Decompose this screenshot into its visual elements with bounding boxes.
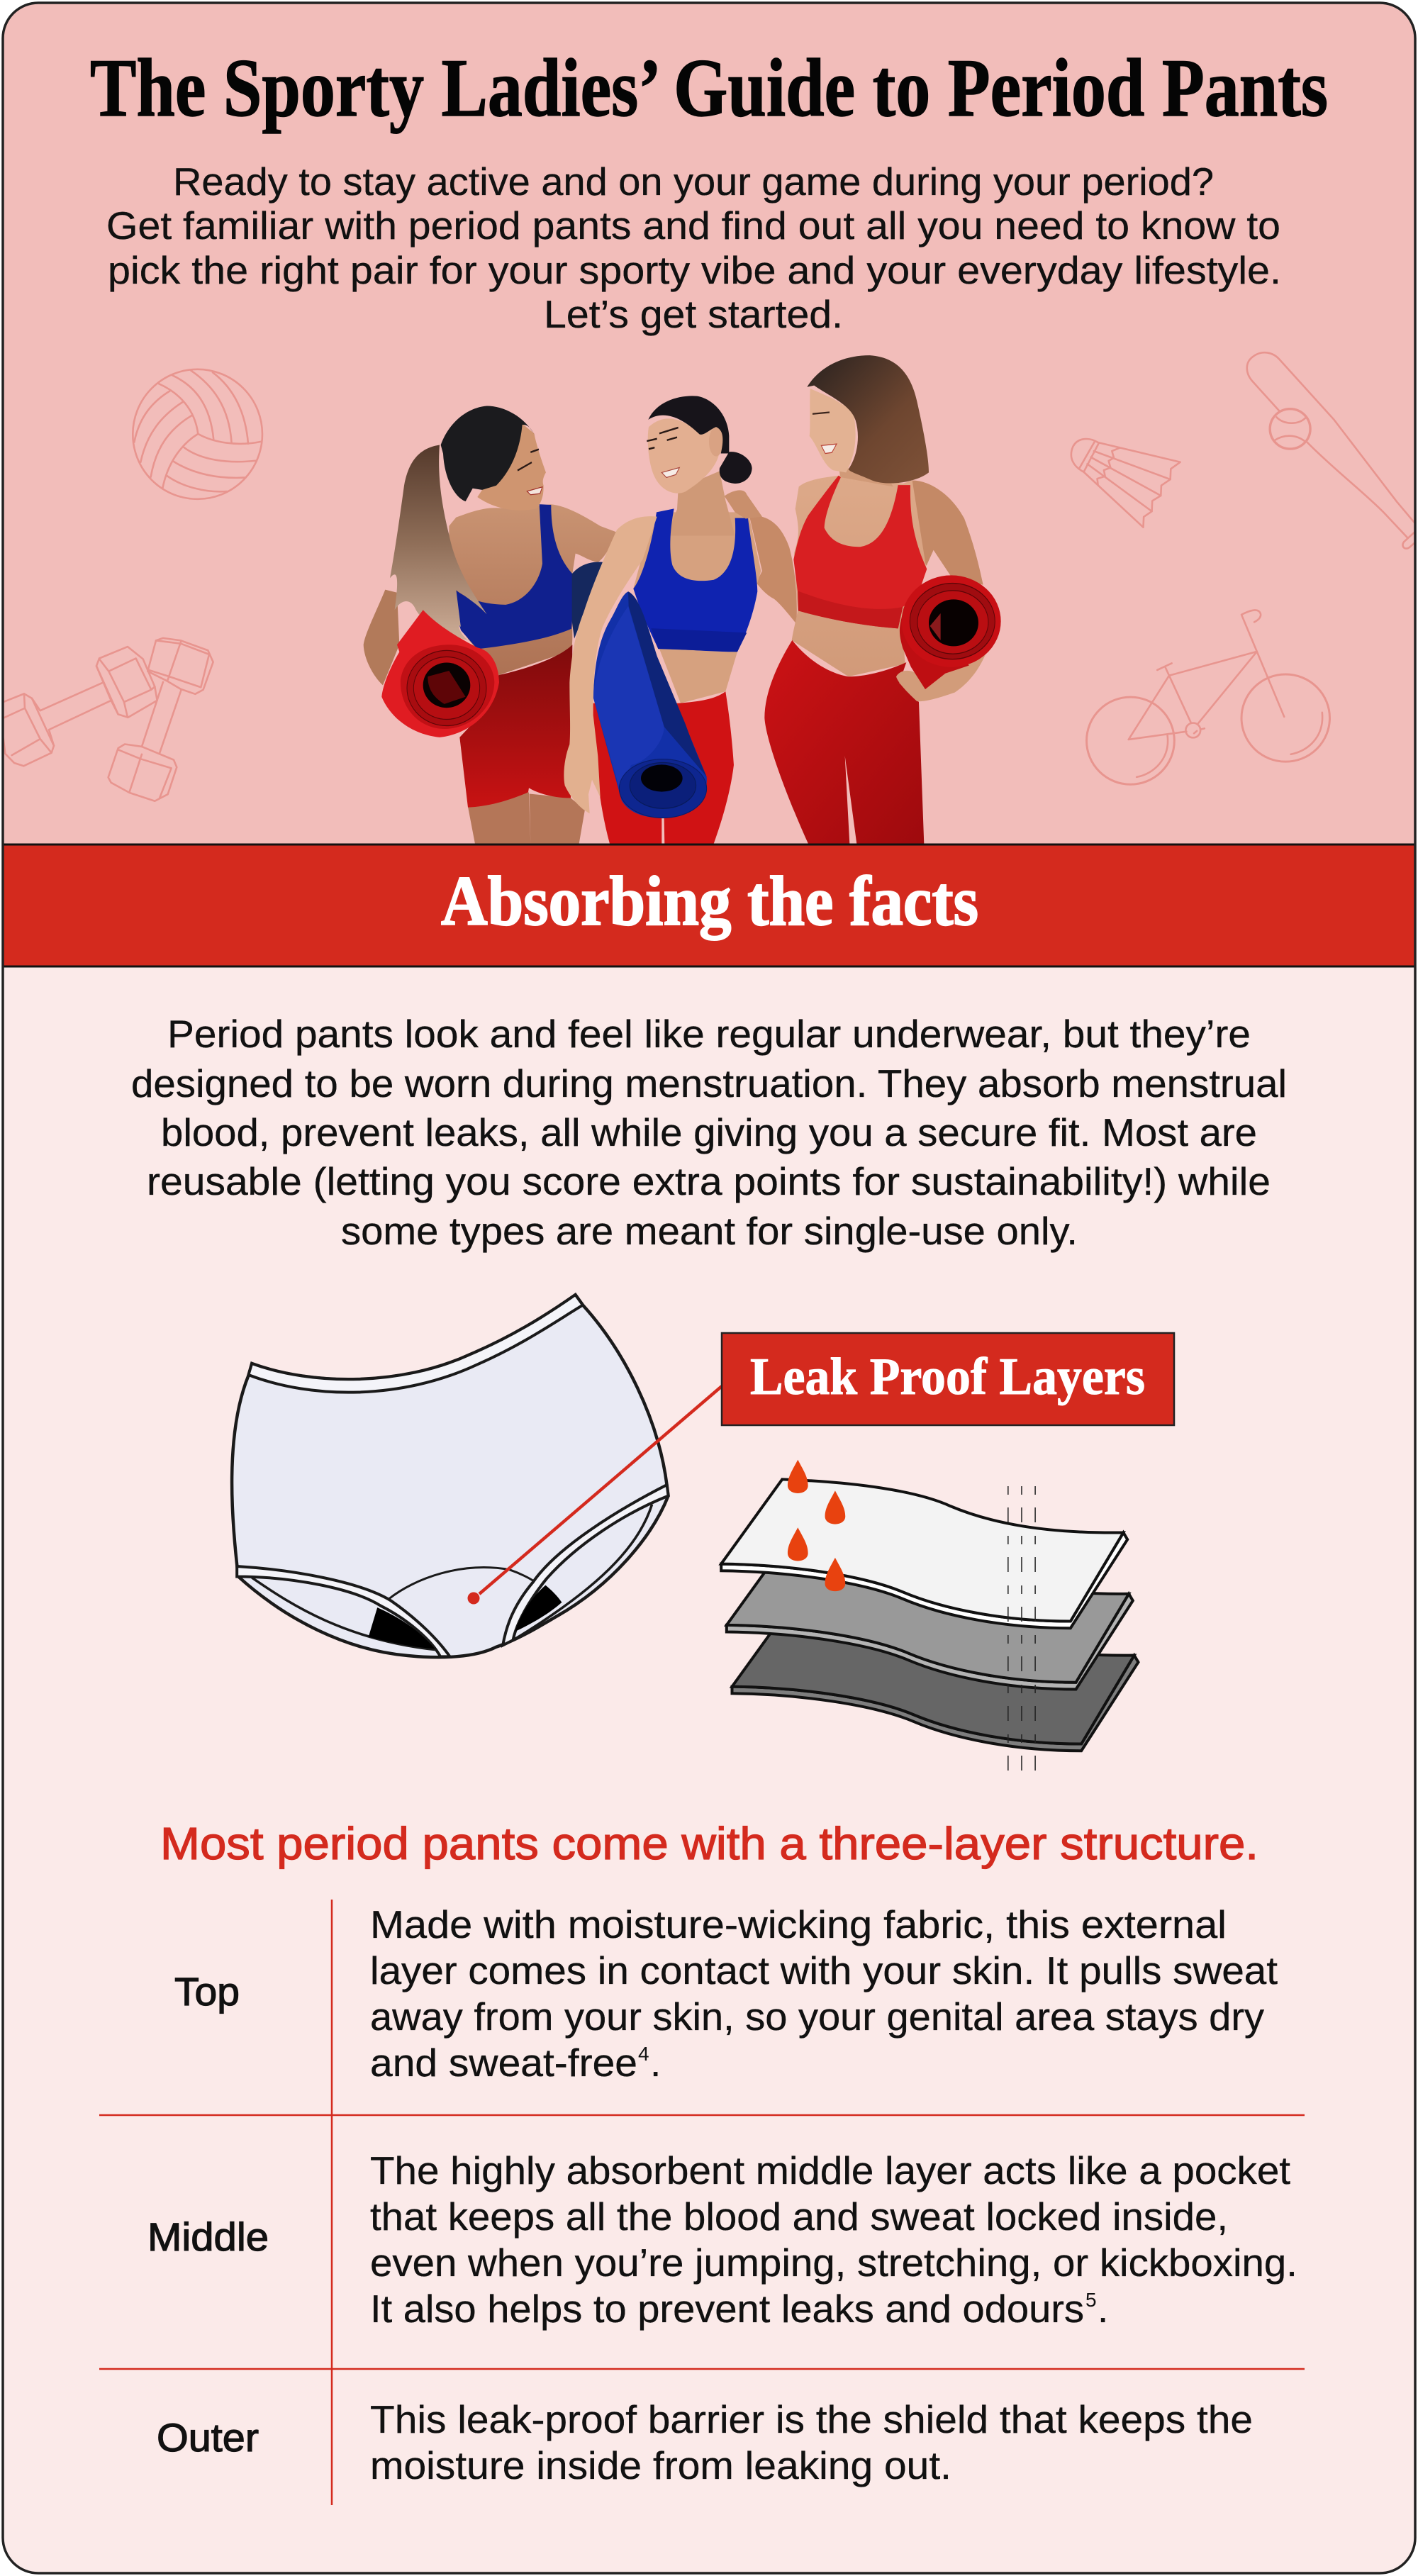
row: Middle: even when you’re jumping, stretching, or kickboxing. — [370, 2241, 1297, 2285]
row: Outer: Outer — [157, 2415, 259, 2460]
row: Middle: that keeps all the blood and sweat locked inside, — [370, 2195, 1228, 2238]
layer: middle — [724, 1573, 1134, 1690]
intro text block: pick the right pair for your sporty vibe and your everyday lifestyle. — [108, 248, 1281, 292]
icon: shuttlecock — [1071, 439, 1180, 528]
row: Outer — [157, 2397, 1253, 2487]
intro text block: Get familiar with period pants and find out all you need to know to — [106, 203, 1280, 247]
row: Middle: . — [1098, 2287, 1108, 2331]
row: Top: 4 — [638, 2043, 649, 2065]
photo: three women with yoga mats — [364, 355, 1001, 844]
heading: Absorbing the facts: Absorbing the facts — [441, 862, 978, 940]
row: Middle: 5 — [1085, 2289, 1097, 2311]
callout: Leak Proof Layers — [722, 1333, 1174, 1425]
icon: dumbbells — [4, 638, 213, 801]
illustration: period pants — [232, 1295, 669, 1657]
row: Top: Made with moisture-wicking fabric, this external — [370, 1902, 1227, 1946]
intro text block: Let’s get started. — [544, 292, 843, 336]
layer: outer — [729, 1635, 1140, 1753]
row: Middle — [147, 2148, 1297, 2331]
description text block: reusable (letting you score extra points for sustainability!) while — [147, 1159, 1271, 1203]
description text block: designed to be worn during menstruation. They absorb menstrual — [131, 1061, 1287, 1105]
description text block — [131, 1012, 1287, 1253]
description text block: blood, prevent leaks, all while giving you a secure fit. Most are — [161, 1110, 1257, 1154]
row: Top: . — [650, 2041, 661, 2085]
callout connector line — [468, 1386, 722, 1604]
callout: Leak Proof Layers: Leak Proof Layers — [750, 1348, 1145, 1406]
blood drops — [788, 1460, 845, 1591]
intro text block: Ready to stay active and on your game during your period? — [173, 160, 1214, 203]
row: Top: away from your skin, so your genital area stays dry — [370, 1995, 1265, 2039]
description text block: some types are meant for single-use only. — [341, 1209, 1078, 1253]
dashed guide lines — [1008, 1486, 1035, 1776]
row: Top: and sweat-free — [370, 2041, 637, 2085]
row: Middle: It also helps to prevent leaks and odours — [370, 2287, 1084, 2331]
row: Top: Top — [174, 1969, 240, 2014]
woman middle with blue mat — [564, 396, 797, 844]
icon: bicycle — [1087, 610, 1329, 784]
row: Top: layer comes in contact with your skin. It pulls sweat — [370, 1948, 1278, 1992]
layer: top — [721, 1479, 1127, 1628]
row: Middle: The highly absorbent middle layer acts like a pocket — [370, 2148, 1290, 2192]
icon: baseball bat and ball — [1247, 352, 1416, 549]
panel: pink hero background — [0, 0, 1418, 845]
row: Top — [174, 1902, 1278, 2085]
intro text block — [106, 160, 1281, 336]
row: Outer: moisture inside from leaking out. — [370, 2443, 951, 2487]
panel: section heading band — [0, 844, 1418, 966]
row: Middle: Middle — [147, 2214, 269, 2259]
icon: volleyball — [133, 369, 262, 499]
table: three layers — [99, 1900, 1305, 2505]
panel: light content background — [0, 966, 1418, 2576]
row: Outer: This leak-proof barrier is the shield that keeps the — [370, 2397, 1253, 2441]
woman left with red mat — [364, 406, 618, 844]
woman right with red mat — [764, 355, 1001, 844]
description text block: Period pants look and feel like regular underwear, but they’re — [167, 1012, 1251, 1056]
subheading: Most period pants come with a three-layer structure. — [160, 1818, 1258, 1869]
illustration: three fabric layers — [721, 1460, 1139, 1776]
